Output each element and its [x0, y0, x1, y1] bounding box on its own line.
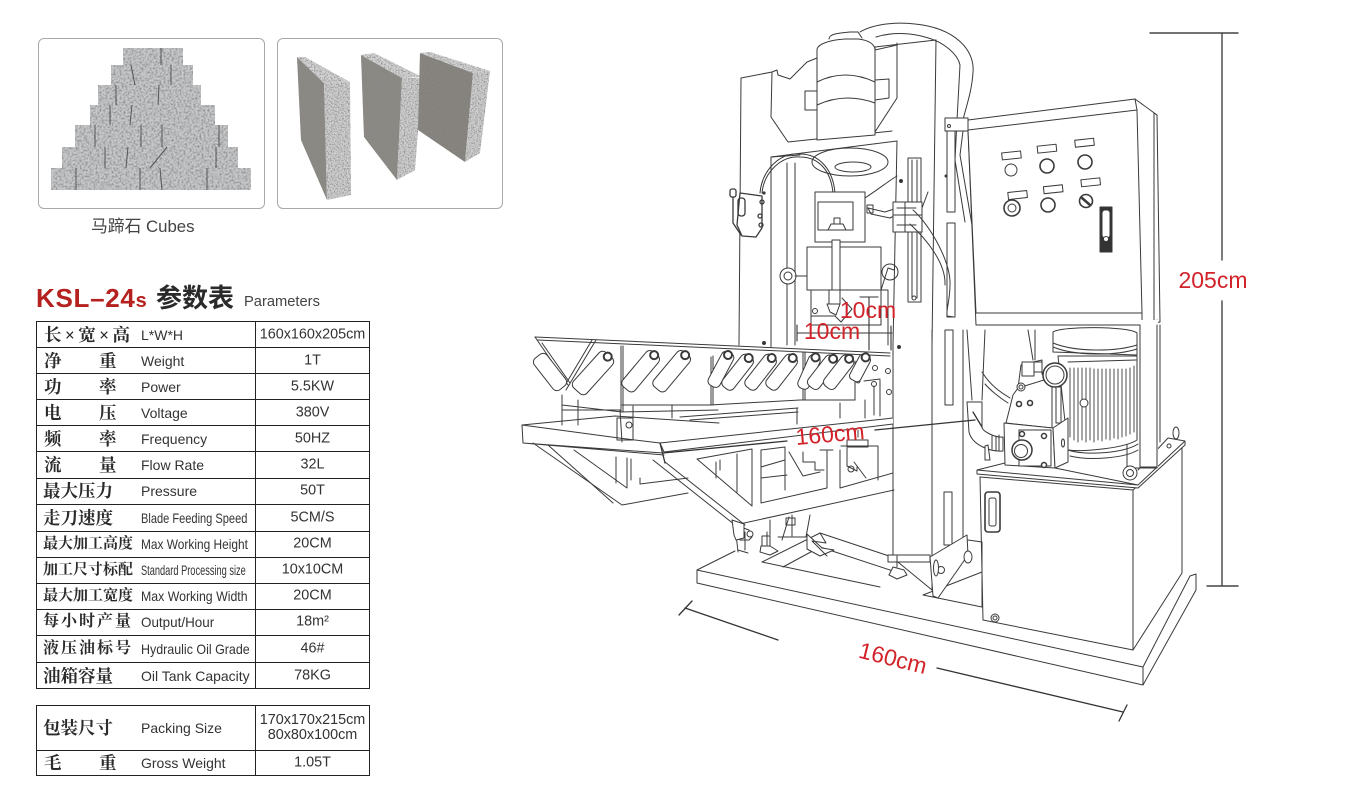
row: max working height: 20CM [293, 536, 332, 552]
row: max working width: 20CM [293, 588, 332, 604]
dimension: cube size 10cm [797, 297, 896, 350]
panel: stone cubes photo [38, 38, 265, 209]
row: oil tank capacity: Oil Tank Capacity [141, 668, 250, 684]
heading: parameters title [36, 283, 320, 313]
lubricator pump [730, 189, 765, 237]
row: flow rate [36, 452, 370, 478]
dimension: cube size 10cm: 10cm [804, 318, 860, 344]
row: gross weight: Gross Weight [141, 755, 226, 771]
row: flow rate: 32L [300, 456, 324, 472]
row: voltage [36, 400, 370, 426]
row: pressure: Pressure [141, 483, 197, 499]
control cabinet [945, 99, 1160, 325]
row: oil tank capacity [43, 666, 331, 686]
dimension: length 160cm [679, 601, 1127, 721]
row: gross weight: 毛 [44, 753, 62, 773]
heading: parameters title: Parameters [244, 294, 320, 310]
cabinet lock [1100, 207, 1112, 252]
row: voltage: 电 [44, 402, 62, 422]
heading: parameters title: 参数表 [156, 283, 234, 313]
machine base [697, 533, 1196, 685]
row: pressure: 50T [300, 483, 325, 499]
row: L*W*H: L*W*H [141, 326, 183, 342]
row: weight: 重 [99, 350, 116, 370]
dimension: width 160cm [660, 412, 982, 463]
foot plate and bolts [888, 535, 982, 607]
row: L*W*H: 160x160x205cm [260, 326, 365, 342]
row: max working width [36, 584, 370, 610]
row: power: Power [141, 378, 181, 394]
row: flow rate: Flow Rate [141, 457, 204, 473]
stone joints [76, 48, 219, 190]
row: hydraulic oil grade [36, 636, 370, 662]
row: power: 率 [99, 376, 116, 396]
switch labels [1001, 138, 1101, 200]
row: pressure [36, 478, 370, 505]
row: max working height: Max Working Height [141, 536, 248, 552]
heading: parameters title: KSL–24s [36, 283, 147, 313]
row: blade feeding speed: 5CM/S [290, 509, 334, 525]
row: packing size: 80x80x100cm [268, 727, 357, 743]
row: max working height [36, 532, 370, 558]
row: hydraulic oil grade: Hydraulic Oil Grade [141, 641, 250, 657]
dimension: width 160cm: 160cm [794, 418, 866, 450]
dimension: height 205cm: 205cm [1178, 267, 1248, 293]
icon: three stone slabs [297, 52, 490, 200]
row: standard processing size: Standard Processing size [141, 562, 246, 578]
row: oil tank capacity: 78KG [294, 667, 331, 683]
row: weight [36, 348, 370, 374]
guide rail and valves [762, 158, 954, 348]
conveyor rollers [531, 347, 873, 397]
table: machine parameters [36, 321, 370, 689]
row: packing size [43, 712, 365, 743]
row: pressure: 最大压力 [43, 481, 113, 501]
top hoses [860, 23, 973, 225]
row: weight: Weight [141, 352, 184, 368]
row: frequency: Frequency [141, 430, 207, 446]
dimension: length 160cm: 160cm [856, 637, 930, 679]
row: standard processing size: 加工尺寸标配 [43, 562, 133, 578]
row: power: 功 [44, 376, 62, 396]
row: hydraulic oil grade: 46# [300, 640, 324, 656]
row: max working height: 最大加工高度 [43, 536, 133, 552]
row: max working width: 最大加工宽度 [43, 588, 133, 604]
electric motor [1053, 328, 1138, 458]
row: flow rate: 量 [99, 455, 116, 475]
row: gross weight: 1.05T [294, 754, 331, 770]
row: oil tank capacity: 油箱容量 [43, 666, 113, 686]
row: weight: 净 [44, 350, 62, 370]
row: blade feeding speed: 走刀速度 [43, 508, 113, 528]
row: L*W*H: 长×宽×高 [44, 324, 133, 344]
row: blade feeding speed: Blade Feeding Speed [141, 510, 247, 526]
saw head and disk [760, 148, 898, 345]
row: voltage: Voltage [141, 404, 188, 420]
row: packing size: 170x170x215cm [260, 712, 365, 728]
main hydraulic cylinder [805, 32, 897, 140]
row: frequency [36, 426, 370, 452]
caption: cubes: 马蹄石 Cubes [91, 217, 195, 236]
row: packing size: 包装尺寸 [43, 718, 113, 738]
hydraulic valve block and gauge [967, 330, 1068, 468]
dimension: cube size 10cm: 10cm [840, 297, 896, 323]
row: output per hour: 18m² [296, 614, 329, 630]
panel: stone slabs photo [277, 38, 503, 209]
row: L*W*H [36, 322, 370, 348]
table: packing [36, 705, 370, 776]
row: blade feeding speed [36, 505, 370, 532]
row: voltage: 压 [99, 402, 116, 422]
row: frequency: 率 [99, 428, 116, 448]
row: power [36, 374, 370, 400]
hydraulic tank [977, 320, 1185, 650]
switch buttons [1005, 164, 1017, 176]
table frame [522, 416, 894, 555]
row: hydraulic oil grade: 液压油标号 [43, 640, 133, 657]
row: weight: 1T [304, 352, 321, 368]
row: output per hour: Output/Hour [141, 614, 214, 630]
row: max working width: Max Working Width [141, 588, 248, 604]
row: standard processing size [36, 558, 370, 584]
row: voltage: 380V [296, 404, 329, 420]
icon: stone cube pyramid [51, 48, 251, 190]
row: frequency: 50HZ [295, 430, 330, 446]
row: frequency: 频 [44, 428, 62, 448]
row: power: 5.5KW [291, 378, 334, 394]
dimension: height 205cm [1150, 33, 1248, 586]
machine tower [739, 40, 963, 590]
row: gross weight [44, 753, 331, 773]
row: packing size: Packing Size [141, 720, 222, 736]
row: standard processing size: 10x10CM [282, 562, 343, 578]
row: output per hour [36, 610, 370, 636]
row: output per hour: 每小时产量 [43, 613, 133, 630]
row: flow rate: 流 [44, 455, 62, 475]
conveyor tray [535, 337, 892, 442]
row: gross weight: 重 [99, 753, 116, 773]
